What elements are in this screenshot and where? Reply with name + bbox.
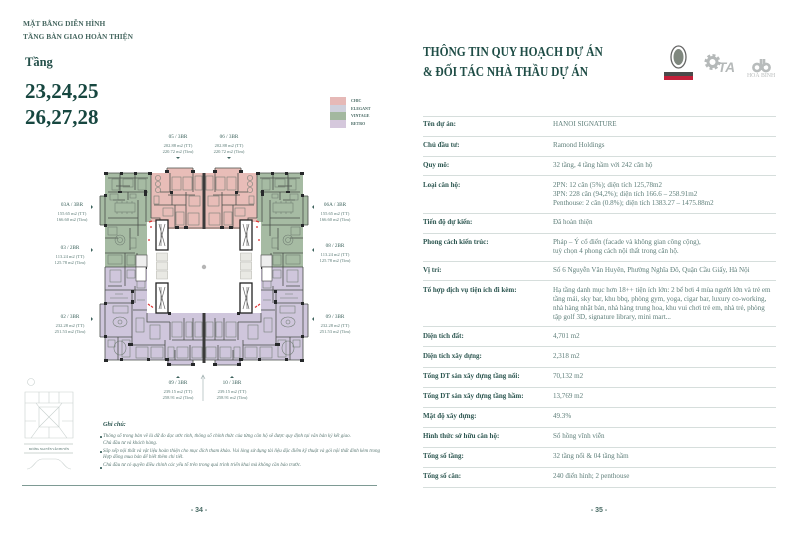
- row: scale: 32 tầng, 4 tầng hầm với 242 căn hộ: [553, 161, 652, 169]
- row: amenities: Tổ hợp dịch vụ tiện ích đi kèm:: [423, 286, 517, 294]
- row: unit types: Penthouse: 2 căn (0.8%); diện tích 1383.27 – 1475.88m2: [553, 198, 714, 206]
- row: total units: 240 điển hình; 2 penthouse: [553, 472, 629, 480]
- row: building area: Diện tích xây dựng:: [423, 352, 482, 360]
- row: total units: [423, 472, 630, 480]
- unit label 03A: 166.60 m2 (Tim): [57, 217, 87, 222]
- row: unit types: 2PN: 12 căn (5%); diện tích 125,78m2: [553, 180, 662, 188]
- row: density: Mật độ xây dựng:: [423, 412, 476, 420]
- row: investor: Ramond Holdings: [553, 140, 604, 148]
- key plan: ĐƯỜNG NGUYỄN VĂN HUYÊN: [29, 448, 69, 451]
- unit label 10 bottom: 258.91 m2 (Tim): [217, 395, 247, 400]
- row: ownership: Hình thức sở hữu căn hộ:: [423, 432, 499, 440]
- unit label 08: 113.24 m2 (TT): [321, 252, 349, 257]
- unit label 09 right: [320, 314, 350, 334]
- row: unit types: 3PN: 228 căn (94,2%); diện tích 166.6 – 258.91m2: [553, 190, 697, 198]
- unit label 10 bottom: 239.15 m2 (TT): [218, 389, 246, 394]
- page number 35: - 35 -: [591, 507, 607, 514]
- unit label 03A: 155.65 m2 (TT): [58, 211, 86, 216]
- row: unit types: [423, 180, 714, 206]
- unit label 03A: [57, 202, 88, 222]
- row: project name: [423, 120, 617, 128]
- unit zone: chic top: [151, 168, 257, 229]
- row: progress: [423, 218, 593, 226]
- row: basement floor area: 13,769 m2: [553, 392, 583, 400]
- row: architecture: Pháp – Ý cổ điển (facade và không gian công cộng),: [553, 238, 701, 246]
- logo: Hoa Binh: HOÀ BÌNH: [747, 73, 775, 79]
- unit label 03A: 03A / 3BR: [61, 202, 83, 208]
- style legend: CHIC: [351, 98, 361, 103]
- unit label 06A: 06A / 3BR: [324, 202, 346, 208]
- unit label 09 right: 09 / 3BR: [326, 314, 344, 320]
- unit label 09 bottom: 239.15 m2 (TT): [164, 389, 192, 394]
- unit label 02: 251.53 m2 (Tim): [55, 329, 85, 334]
- style legend: ELEGANT: [351, 106, 371, 111]
- unit label 03: 125.78 m2 (Tim): [55, 260, 85, 265]
- note title: Ghi chú:: [103, 421, 126, 428]
- unit label 09 bottom: 258.91 m2 (Tim): [163, 395, 193, 400]
- left page heading: MẶT BẰNG DIỄN HÌNH: [23, 19, 105, 28]
- row: location: [423, 266, 750, 274]
- unit label 06: [214, 134, 244, 154]
- style legend: [330, 97, 371, 128]
- row: progress: Tiến độ dự kiến:: [423, 218, 472, 226]
- row: ownership: [423, 432, 604, 440]
- row: scale: Quy mô:: [423, 161, 449, 169]
- row: total floors: Tổng số tầng:: [423, 452, 464, 460]
- row: project name: HANOI SIGNATURE: [553, 120, 617, 128]
- unit label 08: 08 / 2BR: [326, 243, 344, 249]
- row: scale: [423, 161, 652, 169]
- row: architecture: Phong cách kiến trúc:: [423, 238, 489, 246]
- unit label 06: 202.88 m2 (TT): [215, 143, 243, 148]
- notes: [100, 421, 380, 469]
- row: amenities: tập golf 3D, signature library, mini mart...: [553, 312, 671, 320]
- row: architecture: [423, 238, 701, 254]
- note list: Chủ đầu tư và khách hàng.: [103, 440, 157, 446]
- floor numbers: 26,27,28: [25, 105, 98, 129]
- page number 34: - 34 -: [191, 507, 207, 514]
- unit label 06: 06 / 3BR: [220, 134, 238, 140]
- row: density: 49.3%: [553, 412, 571, 420]
- note list: Hợp đồng mua bán để biết thêm chi tiết.: [103, 455, 184, 460]
- row: project name: Tên dự án:: [423, 120, 456, 128]
- central party wall: [202, 173, 206, 363]
- footer rule left: [22, 484, 377, 486]
- row: amenities: nhà hàng nhật bản, nhà hàng trung hoa, khu vui chơi trẻ em, nhà trẻ, phòng: [553, 304, 765, 312]
- logo: Hoa Binh: [747, 59, 775, 79]
- note list: Sắp xếp nội thất và vật liệu hoàn thiện cho mục đích tham khảo. Vui lòng sử dụng tài liệu đặc điểm kỹ thuật và gói nội thất đính kèm trong: [103, 449, 380, 454]
- row: land area: Diện tích đất:: [423, 332, 464, 340]
- floor numbers: [25, 79, 98, 129]
- unit label 09 right: 232.28 m2 (TT): [321, 323, 349, 328]
- unit label 08: 125.78 m2 (Tim): [320, 258, 350, 263]
- floor plan: [100, 168, 308, 366]
- unit label 05: 202.88 m2 (TT): [164, 143, 192, 148]
- row: land area: [423, 332, 580, 340]
- vertical arrow: [200, 374, 206, 401]
- unit label 06A: 166.60 m2 (Tim): [320, 217, 350, 222]
- row: density: [423, 412, 571, 420]
- style legend: VINTAGE: [351, 113, 369, 118]
- row: unit types: Loại căn hộ:: [423, 180, 460, 188]
- row: progress: Đã hoàn thiện: [553, 218, 593, 226]
- row: amenities: Hạ tầng danh mục hơn 18++ tiện ích lớn: 2 bể bơi 4 mùa người lớn và trẻ em: [553, 286, 770, 294]
- floor label: Tầng: [25, 55, 53, 69]
- row: total floors: [423, 452, 629, 460]
- unit label 02: [54, 314, 86, 334]
- unit label 03: 03 / 2BR: [61, 245, 79, 251]
- unit label 09 bottom: [162, 380, 194, 400]
- row: above-ground floor area: [423, 372, 583, 380]
- unit label 02: 232.28 m2 (TT): [56, 323, 84, 328]
- row: location: Số 6 Nguyễn Văn Huyên, Phường Nghĩa Đô, Quận Cầu Giấy, Hà Nội: [553, 266, 750, 274]
- row: architecture: tuỳ chọn 4 phong cách nội thất trong căn hộ.: [553, 246, 679, 254]
- unit label 05: 220.72 m2 (Tim): [163, 149, 193, 154]
- row: basement floor area: [423, 392, 583, 400]
- row: above-ground floor area: Tổng DT sàn xây dựng tầng nổi:: [423, 372, 520, 380]
- unit label 06A: 155.65 m2 (TT): [321, 211, 349, 216]
- row: investor: [423, 140, 604, 148]
- note list: Thông số trong bản vẽ là dữ đo đạc ước tính, thông số chính thức của từng căn hộ sẽ được quy định tại văn bản ký kết giao.: [103, 434, 351, 439]
- logo: CTA: TA: [718, 60, 735, 75]
- unit label 09 right: 251.53 m2 (Tim): [320, 329, 350, 334]
- unit label 02: 02 / 3BR: [61, 314, 79, 320]
- left half: walls and furniture: [100, 168, 204, 366]
- row: basement floor area: Tổng DT sàn xây dựng tầng hầm:: [423, 392, 524, 400]
- row: amenities: tầng mái, sky bar, khu bbq, phòng gym, yoga, cigar bar, luxury co-working,: [553, 294, 766, 302]
- unit label 05: [162, 134, 194, 154]
- unit label 10 bottom: [216, 380, 248, 400]
- row: amenities: [423, 286, 770, 320]
- floor numbers: 23,24,25: [25, 79, 98, 103]
- row: land area: 4,701 m2: [553, 332, 580, 340]
- logo: Bureau Veritas: [664, 45, 693, 80]
- row: building area: 2,318 m2: [553, 352, 580, 360]
- central void marker: [202, 265, 206, 269]
- right half: walls and furniture: [204, 168, 308, 366]
- unit label 03: [55, 245, 86, 265]
- unit label 08: [320, 243, 350, 263]
- right page title: & ĐỐI TÁC NHÀ THẦU DỰ ÁN: [423, 65, 588, 80]
- row: investor: Chủ đầu tư:: [423, 140, 460, 148]
- unit label 06: 220.72 m2 (Tim): [214, 149, 244, 154]
- row: above-ground floor area: 70,132 m2: [553, 372, 583, 380]
- row: total floors: 32 tầng nổi & 04 tầng hầm: [553, 452, 629, 460]
- row: building area: [423, 352, 580, 360]
- unit label 09 bottom: 09 / 3BR: [169, 380, 187, 386]
- right page title: [423, 44, 603, 80]
- note list: Chủ đầu tư có quyền điều chỉnh các yếu tố trên trong quá trình triển khai mà không cần báo trước.: [103, 462, 301, 468]
- unit label 03: 113.24 m2 (TT): [56, 254, 84, 259]
- left page heading: [23, 19, 133, 40]
- unit pointer arrows: [91, 157, 314, 378]
- row: ownership: Sổ hồng vĩnh viễn: [553, 432, 604, 440]
- style legend: RETRO: [351, 121, 365, 126]
- unit zone: retro bottom: [100, 267, 308, 365]
- row: location: Vị trí:: [423, 266, 441, 274]
- unit label 10 bottom: 10 / 3BR: [223, 380, 241, 386]
- key plan: [24, 378, 74, 470]
- logo: CTA: [704, 54, 735, 75]
- row: total units: Tổng số căn:: [423, 472, 461, 480]
- left page heading: TẦNG BÀN GIAO HOÀN THIỆN: [23, 32, 133, 40]
- unit label 06A: [320, 202, 350, 222]
- unit zone: vintage left: [100, 173, 151, 267]
- unit label 05: 05 / 3BR: [169, 134, 187, 140]
- note list: [100, 433, 380, 469]
- right page title: THÔNG TIN QUY HOẠCH DỰ ÁN: [423, 45, 603, 60]
- unit zone: vintage right: [257, 173, 308, 267]
